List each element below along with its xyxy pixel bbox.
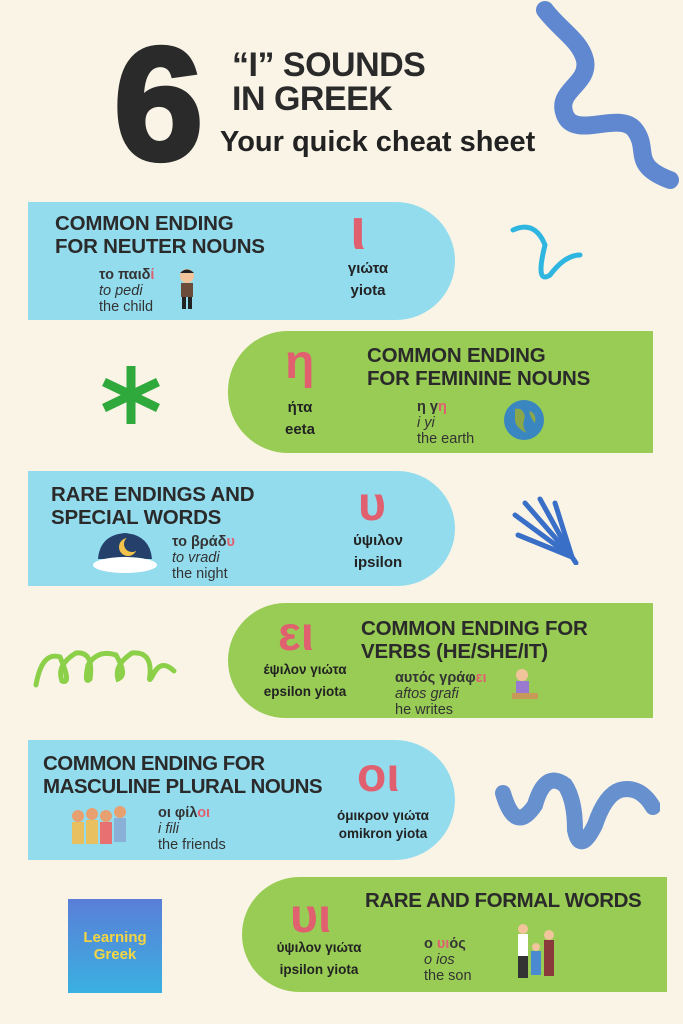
panel: upsilon iota: [242, 877, 667, 992]
example: [172, 534, 235, 582]
heading text: [232, 46, 425, 118]
name: [263, 662, 347, 699]
icon: friends: [72, 806, 126, 844]
example: the friends: [158, 837, 226, 853]
heading: RARE AND FORMAL WORDS: [365, 889, 641, 912]
example: the earth: [417, 431, 474, 447]
example: [424, 936, 472, 984]
example: η γη: [417, 399, 447, 415]
decoration: blue rays: [512, 496, 578, 565]
name: epsilon yiota: [264, 684, 346, 699]
example: to pedi: [99, 283, 143, 299]
example: [395, 670, 486, 718]
example: το παιδί: [99, 267, 154, 283]
heading: MASCULINE PLURAL NOUNS: [43, 775, 322, 798]
heading: RARE ENDINGS AND: [51, 483, 254, 506]
icon: moon cloud: [93, 533, 157, 573]
example: the night: [172, 566, 228, 582]
subtitle: Your quick cheat sheet: [220, 126, 535, 158]
name: όμικρον γιώτα: [337, 808, 429, 823]
heading: SPECIAL WORDS: [51, 506, 221, 529]
name: yiota: [350, 282, 386, 299]
heading: [43, 752, 322, 798]
letters: ει: [278, 608, 314, 661]
heading: FOR NEUTER NOUNS: [55, 235, 265, 258]
logo text: [83, 929, 147, 963]
heading: COMMON ENDING: [55, 212, 233, 235]
name: [277, 940, 362, 977]
heading: [367, 344, 590, 390]
decoration: blue squiggle top right: [536, 1, 679, 189]
example: οι φίλοι: [158, 805, 210, 821]
example: aftos grafi: [395, 686, 459, 702]
heading: COMMON ENDING FOR: [361, 617, 588, 640]
name: [353, 532, 403, 571]
icon: earth: [504, 400, 544, 440]
example: o ios: [424, 952, 455, 968]
decoration: blue wave: [495, 772, 660, 850]
name: ύψιλον: [353, 532, 403, 549]
heading: [51, 483, 254, 529]
logo text: Learning: [83, 929, 147, 946]
example: to vradi: [172, 550, 220, 566]
icon: family: [518, 924, 554, 978]
icon: writing person: [512, 669, 538, 699]
name: ipsilon: [354, 554, 402, 571]
name: γιώτα: [348, 260, 388, 277]
icon: child: [180, 269, 194, 309]
example: the son: [424, 968, 472, 984]
example: [417, 399, 474, 447]
title: [114, 14, 535, 193]
name: ήτα: [288, 399, 312, 416]
heading: VERBS (HE/SHE/IT): [361, 640, 548, 663]
name: ύψιλον γιώτα: [277, 940, 361, 955]
letter upsilon: υ: [358, 478, 386, 531]
panel: epsilon iota: [228, 603, 653, 718]
heading: FOR FEMININE NOUNS: [367, 367, 590, 390]
example: [158, 805, 226, 853]
decoration: cyan loop: [510, 224, 582, 280]
name: omikron yiota: [339, 826, 427, 841]
letter iota: ι: [350, 197, 366, 262]
name: eeta: [285, 421, 315, 438]
heading: [55, 212, 265, 258]
logo text: Greek: [94, 946, 136, 963]
example: i fili: [158, 821, 179, 837]
big number 6: 6: [114, 14, 199, 193]
name: [348, 260, 388, 299]
example: the child: [99, 299, 153, 315]
heading: COMMON ENDING FOR: [43, 752, 265, 775]
example: i yi: [417, 415, 435, 431]
letters: οι: [357, 749, 400, 802]
example: το βράδυ: [172, 534, 235, 550]
logo: Learning Greek: [68, 899, 162, 993]
name: [285, 399, 316, 438]
heading text: IN GREEK: [232, 80, 392, 118]
name: έψιλον γιώτα: [263, 662, 347, 677]
decoration: green asterisk: [102, 366, 160, 424]
example: ο υιός: [424, 936, 466, 952]
heading: [361, 617, 588, 663]
example: he writes: [395, 702, 453, 718]
heading: COMMON ENDING: [367, 344, 545, 367]
example: αυτός γράφει: [395, 670, 486, 686]
heading text: “I” SOUNDS: [232, 46, 425, 84]
panel: iota: [28, 202, 455, 320]
decoration: green spring: [34, 650, 176, 688]
panel: upsilon: [28, 471, 455, 586]
name: [337, 808, 429, 841]
example: [99, 267, 154, 315]
letter eta: η: [285, 336, 314, 389]
panel: omicron iota: [28, 740, 455, 860]
letters: υι: [290, 890, 331, 943]
name: ipsilon yiota: [280, 962, 358, 977]
panel: eta: [228, 331, 653, 453]
